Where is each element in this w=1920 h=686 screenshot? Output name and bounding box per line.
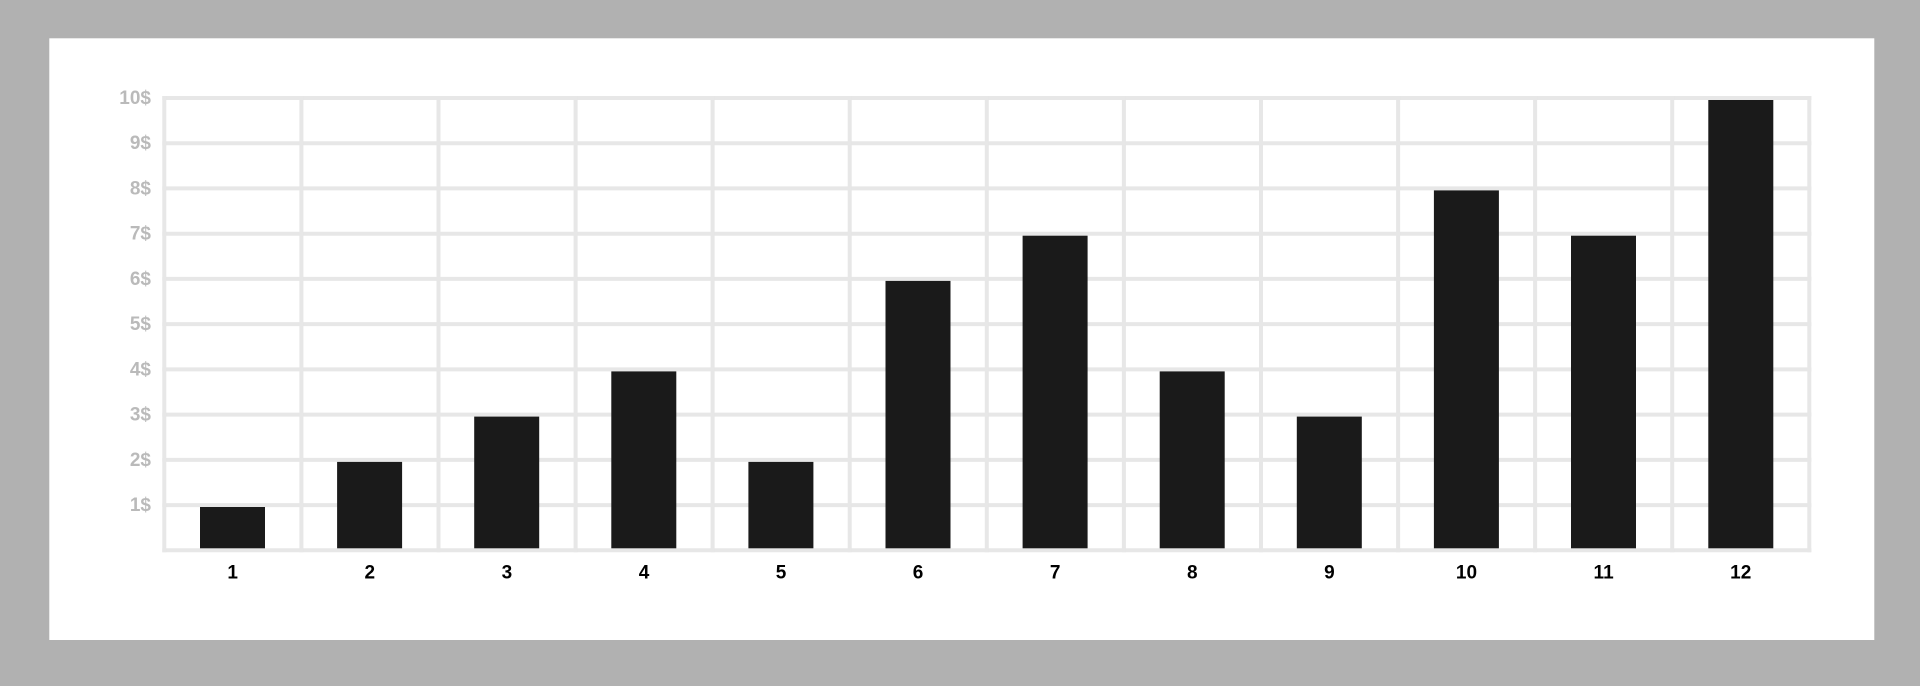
y-axis labels: 9$ [130,133,151,154]
x-axis labels: 10 [1456,562,1477,583]
x-axis labels: 9 [1324,562,1335,583]
x-axis labels: 6 [913,562,923,583]
y-axis labels: 3$ [130,405,151,426]
x-axis labels: 7 [1050,562,1060,583]
y-axis labels: 2$ [130,450,151,471]
y-axis labels: 6$ [130,269,151,290]
x-axis labels: 8 [1187,562,1198,583]
y-axis labels: 10$ [119,88,151,109]
x-axis labels: 5 [776,562,787,583]
y-axis labels: 7$ [130,224,151,245]
x-axis labels: 3 [502,562,512,583]
y-axis labels: 4$ [130,359,151,380]
y-axis labels: 5$ [130,314,151,335]
y-axis labels: 8$ [130,178,151,199]
bars: values by month [200,100,1773,548]
x-axis labels: 11 [1594,562,1614,583]
y-axis labels: 1$ [130,495,151,516]
x-axis labels: 4 [639,562,650,583]
x-axis labels: 12 [1730,562,1751,583]
x-axis labels [227,562,1751,583]
x-axis labels: 2 [365,562,375,583]
y-axis labels [119,88,151,516]
grid lines [162,96,1811,552]
x-axis labels: 1 [227,562,238,583]
